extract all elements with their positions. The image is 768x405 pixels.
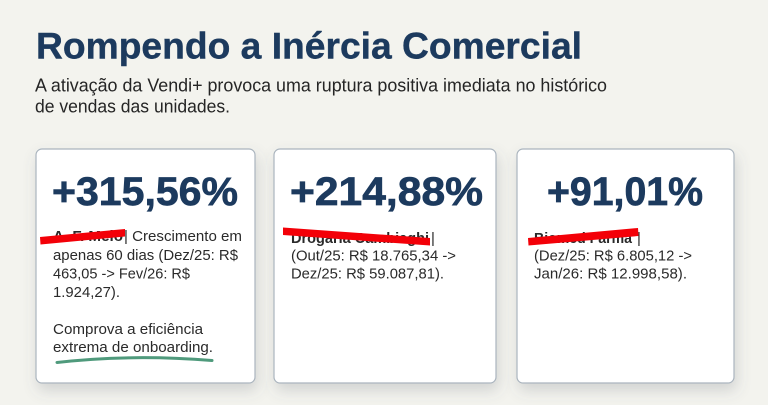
green underline	[57, 358, 212, 362]
callout	[53, 321, 213, 356]
panel: card A. F. Melo	[36, 149, 255, 383]
red redaction strike	[40, 229, 125, 244]
big number: +91,01%	[547, 170, 703, 214]
description: Jan/26: R$ 12.998,58).	[534, 266, 687, 282]
description: (Dez/25: R$ 6.805,12 ->	[534, 248, 692, 264]
subtitle: de vendas das unidades.	[35, 96, 230, 116]
big number: +315,56%	[52, 170, 238, 214]
description: A. F. Melo	[53, 228, 123, 245]
panel: card Biomed Farma	[517, 149, 734, 383]
red redaction strike	[283, 228, 430, 246]
title: Rompendo a Inércia Comercial	[36, 26, 582, 66]
red redaction strike	[528, 228, 638, 246]
big number: +214,88%	[290, 170, 483, 214]
description	[291, 230, 456, 282]
description: Dez/25: R$ 59.087,81).	[291, 266, 444, 282]
subtitle: A ativação da Vendi+ provoca uma ruptura positiva imediata no histórico	[35, 76, 607, 96]
description: Drogaria Cambiaghi	[291, 230, 429, 247]
description	[534, 230, 692, 282]
description: |	[637, 230, 641, 247]
subtitle	[35, 76, 607, 116]
description: 1.924,27).	[53, 284, 120, 301]
description: apenas 60 dias (Dez/25: R$	[53, 247, 239, 264]
panel: card Drogaria	[274, 149, 496, 383]
description: |	[431, 230, 435, 247]
description: 463,05 -> Fev/26: R$	[53, 266, 191, 282]
callout: Comprova a eficiência	[53, 321, 204, 338]
description: (Out/25: R$ 18.765,34 ->	[291, 248, 456, 264]
callout: extrema de onboarding.	[53, 339, 213, 356]
description: Biomed Farma	[534, 230, 633, 247]
description	[53, 228, 242, 301]
description: | Crescimento em	[124, 228, 242, 245]
